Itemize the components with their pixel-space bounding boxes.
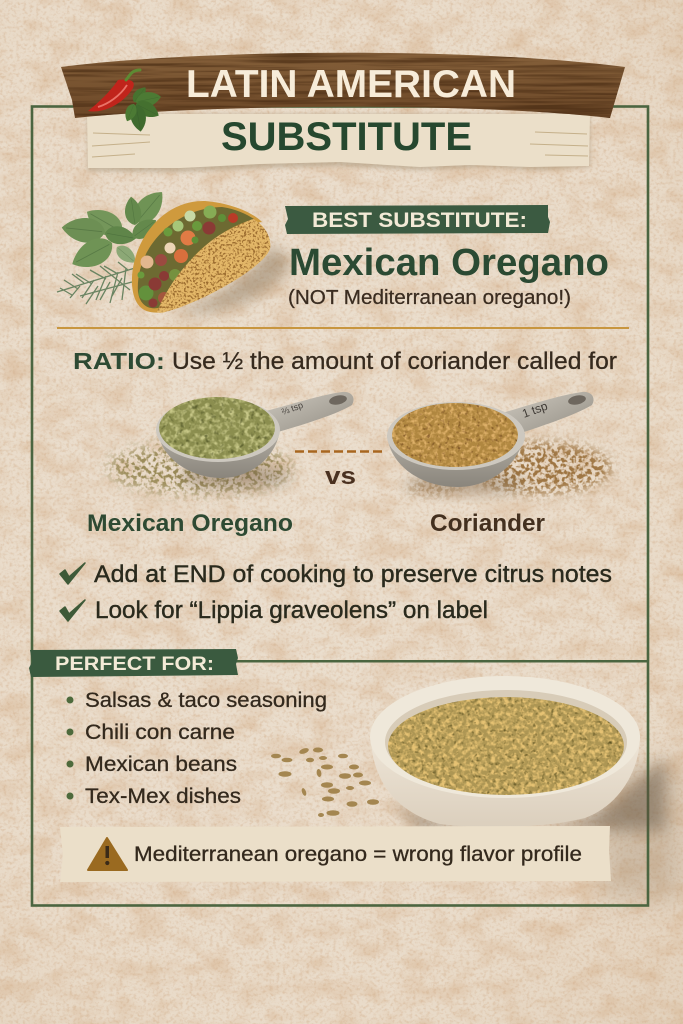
perfect for list: Tex-Mex dishes: [85, 785, 241, 808]
main name: Mexican Oregano: [289, 242, 609, 284]
scoop labels: Coriander: [430, 510, 545, 537]
perfect for list: Mexican beans: [85, 753, 237, 776]
cream plank: substitute: [87, 114, 590, 172]
icon: warning triangle: [88, 838, 127, 870]
scoop: mexican oregano: ⅔ tsp: [280, 400, 304, 417]
label pill: BEST SUBSTITUTE:: [312, 209, 527, 232]
tips checklist: [60, 561, 612, 624]
scattered coriander seeds: [271, 747, 379, 817]
vs label: vs: [325, 463, 356, 490]
ratio line: RATIO:: [73, 348, 165, 374]
subtitle: SUBSTITUTE: [221, 115, 472, 159]
tip 1: Add at END of cooking to preserve citrus notes: [94, 561, 612, 588]
wood plank: latin american: [61, 53, 625, 118]
coriander pile: [392, 403, 518, 467]
perfect for label: PERFECT FOR:: [55, 654, 214, 675]
taco shell front: [157, 219, 270, 313]
taco shell back: [132, 201, 262, 313]
ratio line: Use ½ the amount of coriander called for: [172, 348, 617, 375]
scoop labels: [87, 510, 545, 537]
scoop: coriander: 1 tsp: [520, 399, 550, 421]
oregano pile: [159, 397, 275, 459]
warning text: Mediterranean oregano = wrong flavor profile: [134, 843, 582, 866]
label pill: [285, 205, 550, 234]
perfect for list: Chili con carne: [85, 721, 235, 744]
green frame: [32, 106, 648, 906]
icon: chili and leaves: [88, 70, 162, 133]
herbs: [57, 185, 170, 304]
perfect for list: Salsas & taco seasoning: [85, 689, 327, 712]
title text: LATIN AMERICAN: [186, 63, 516, 106]
perfect for list: [66, 689, 327, 808]
note: (NOT Mediterranean oregano!): [288, 287, 571, 309]
scoop: mexican oregano: [108, 392, 354, 494]
section rule: [34, 660, 647, 662]
perfect for label: [29, 649, 238, 677]
tip 2: Look for “Lippia graveolens” on label: [95, 597, 488, 624]
spice pile: [388, 697, 624, 795]
warning strip: [60, 826, 611, 882]
spice bowl: [370, 676, 665, 830]
taco with herbs: [57, 185, 292, 313]
orange divider: [57, 327, 629, 329]
dashed connector: [295, 450, 384, 453]
title banner: [61, 53, 625, 172]
best substitute block: [285, 205, 609, 309]
scoop labels: Mexican Oregano: [87, 510, 293, 537]
taco filling: [138, 206, 254, 308]
scoop: coriander: [387, 392, 612, 494]
